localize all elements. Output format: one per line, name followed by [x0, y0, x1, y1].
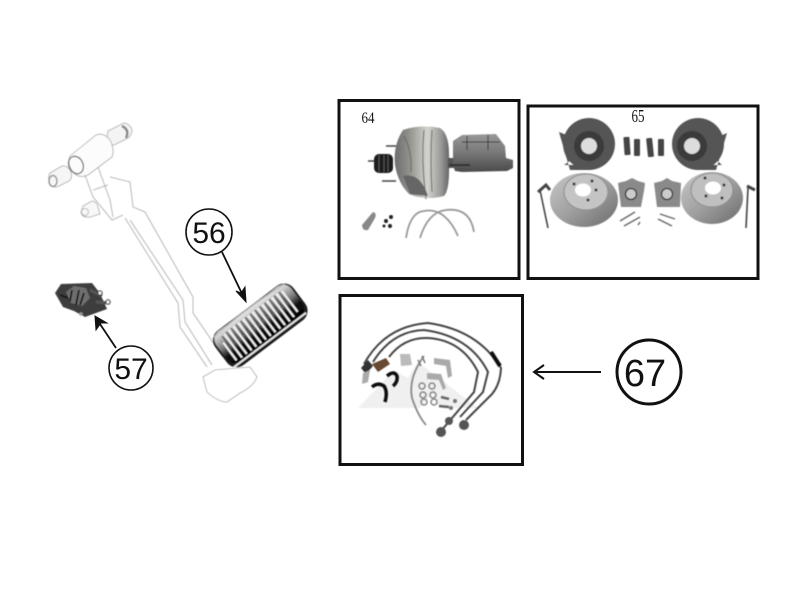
panel: 67 brake hose kit: [340, 296, 522, 464]
pedal bushing left: [49, 166, 72, 187]
icon: backing plates, pads, rotors and calipers: [538, 118, 755, 228]
callout 67: [617, 340, 681, 404]
callout 56: 56: [192, 217, 226, 250]
label 64: 64: [362, 110, 374, 127]
pedal bushing right: [107, 123, 132, 145]
icon: braided hoses and hardware: [361, 323, 501, 437]
pedal foot plate: [203, 367, 257, 402]
arrow to panel 67: [534, 365, 601, 379]
pedal pad 56: [208, 279, 312, 372]
callout 57: [109, 346, 153, 390]
pedal lever: [85, 167, 223, 367]
callout 67: 67: [624, 353, 666, 395]
switch part 57: [55, 283, 110, 317]
panel: 64 brake booster: [339, 100, 519, 278]
icon: brake booster and master cylinder: [362, 126, 513, 238]
brake pedal arm drawing: [49, 123, 257, 402]
panel: 65 disc brake kit: [528, 106, 758, 278]
label 65: 65: [632, 106, 644, 126]
callout 57: 57: [114, 353, 148, 386]
pedal stud: [81, 201, 100, 217]
callout 56: [186, 209, 232, 255]
icon: faded logo: [358, 362, 478, 408]
arrow to switch: [95, 316, 116, 348]
arrow to pedal pad: [222, 252, 246, 302]
pivot tube: [66, 134, 113, 176]
